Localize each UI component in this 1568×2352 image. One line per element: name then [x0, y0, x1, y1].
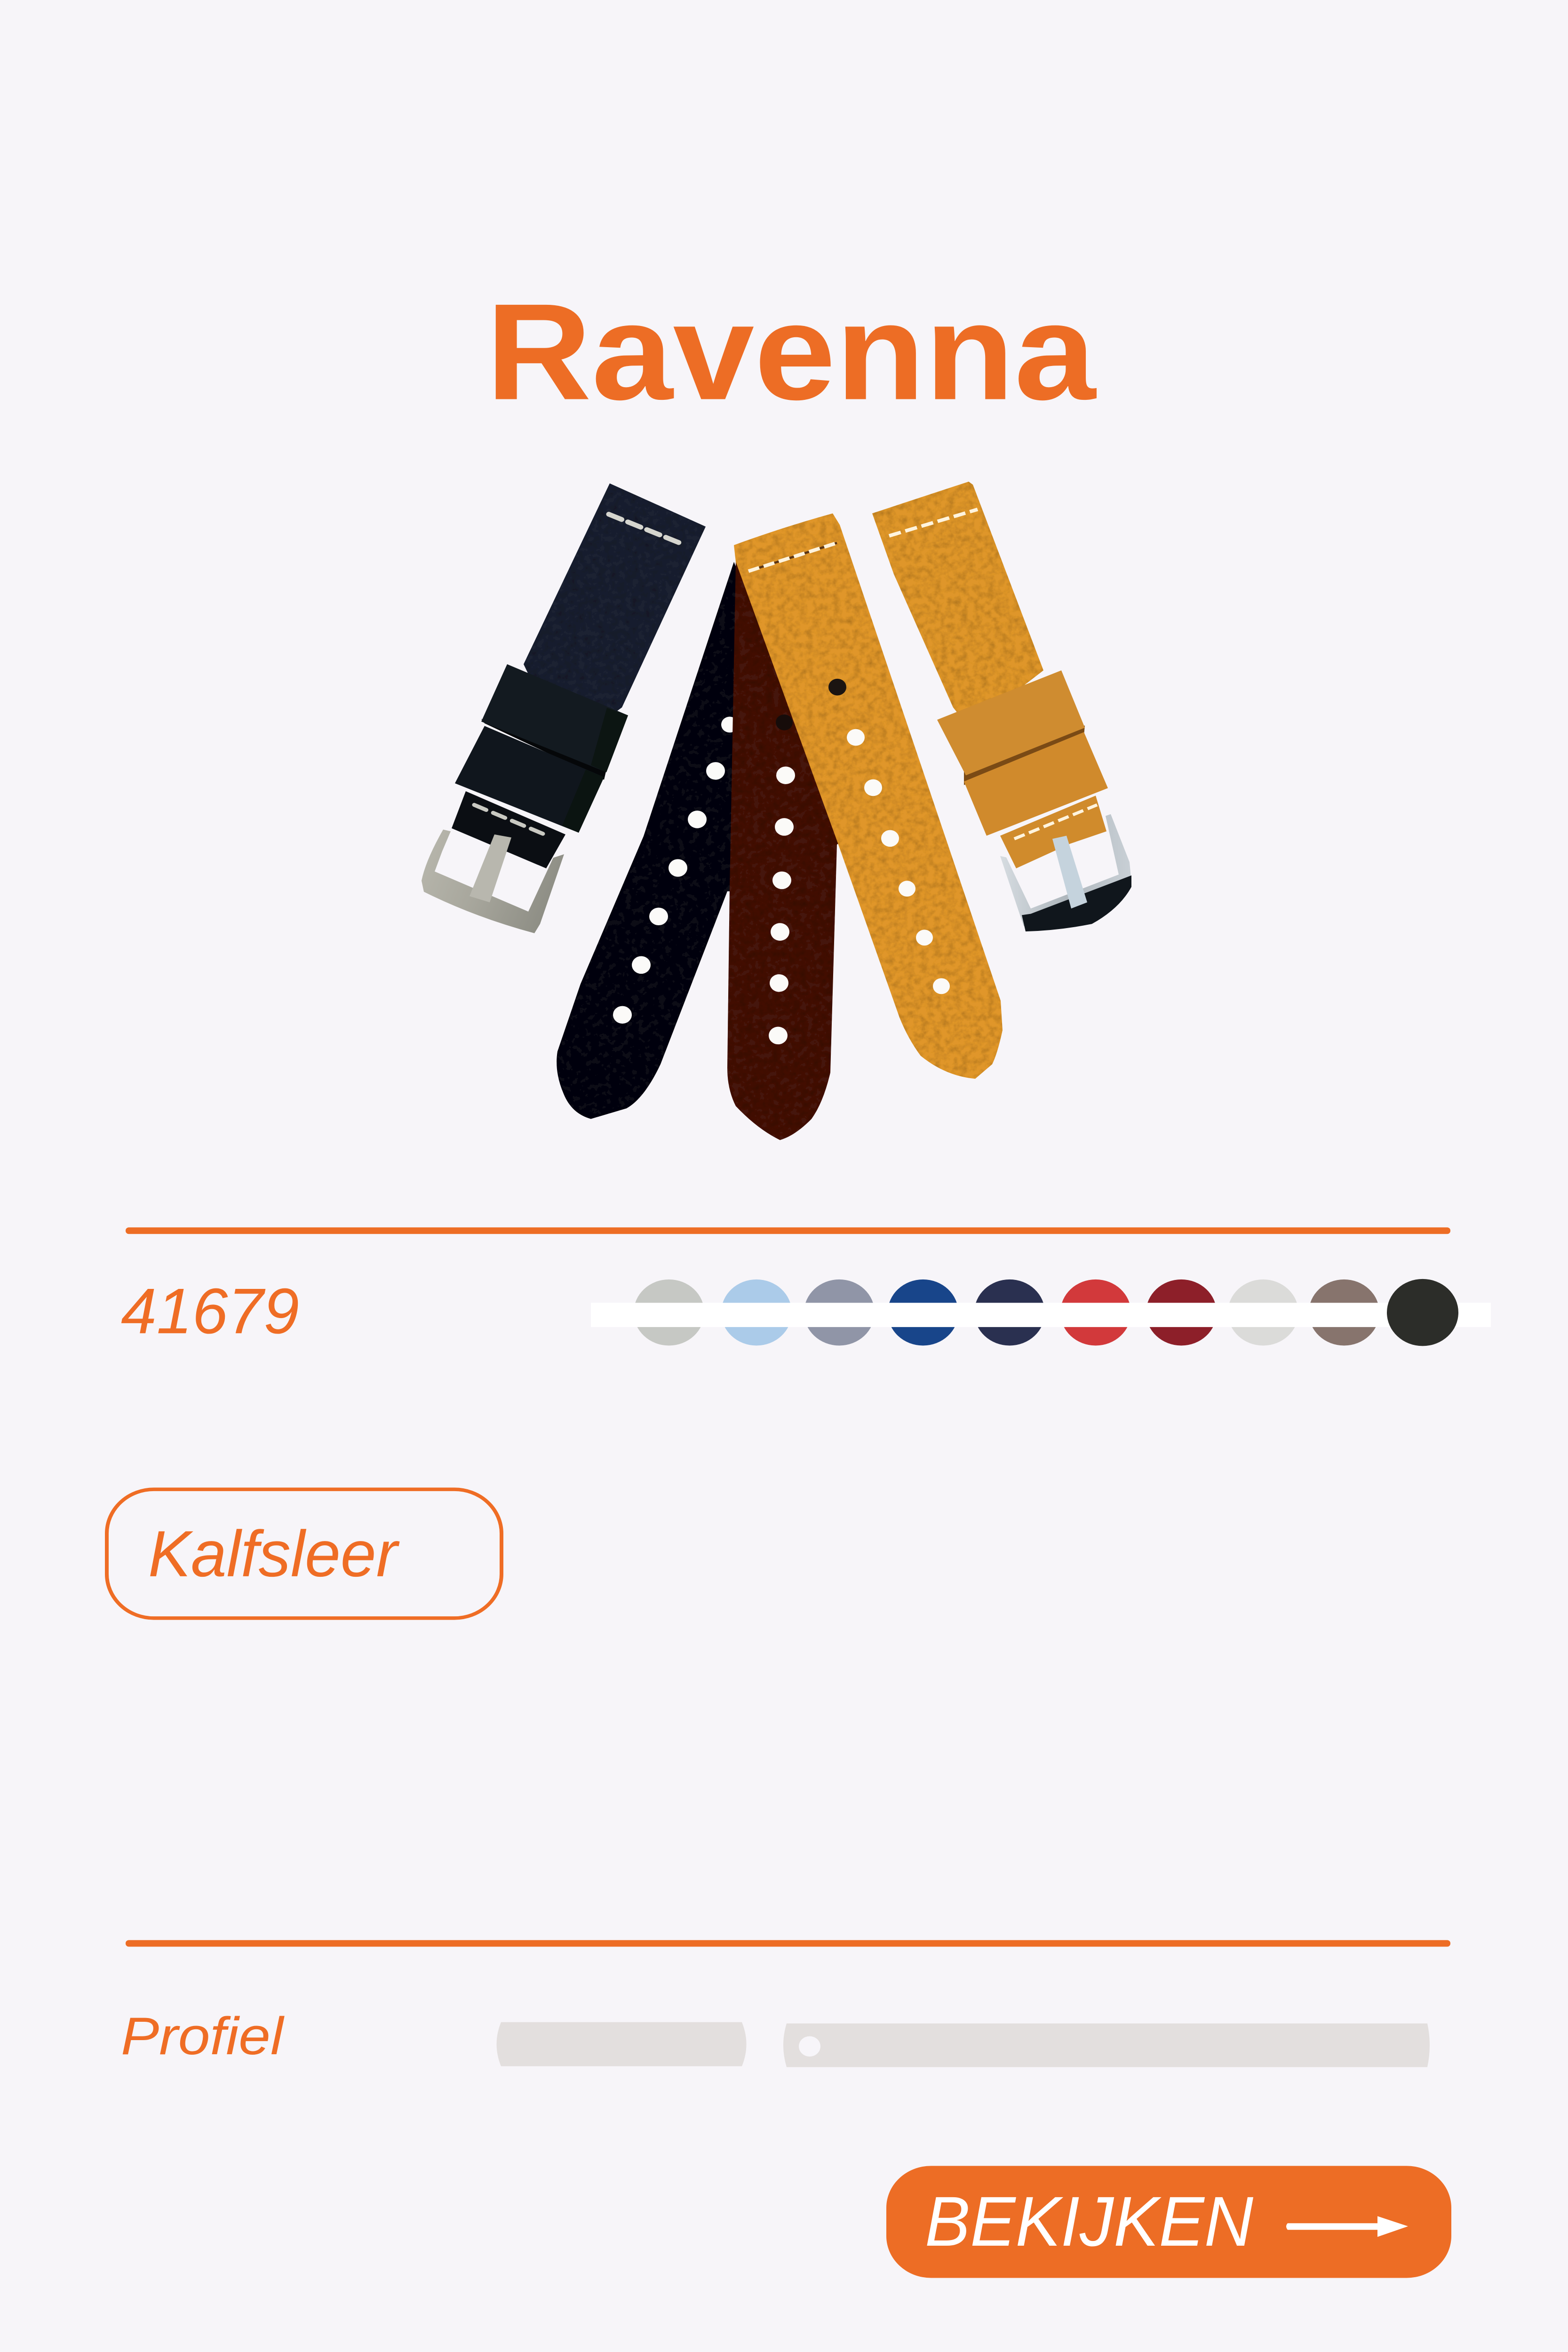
profile label: Profiel	[121, 2007, 285, 2066]
title: Ravenna	[486, 275, 1097, 428]
strap: brown pointed half	[727, 562, 847, 1140]
strap holes	[769, 766, 795, 1044]
strap: black buckle half	[422, 484, 706, 933]
strap holes	[613, 762, 725, 1024]
stitching	[748, 543, 837, 571]
strap profile: short piece	[497, 2022, 746, 2066]
strap: tan buckle half	[872, 482, 1131, 931]
view button: BEKIJKEN	[925, 2182, 1254, 2261]
strap holes	[847, 729, 950, 994]
stitching	[889, 509, 978, 536]
strap: tan pointed half	[734, 513, 1003, 1079]
view button	[886, 2166, 1451, 2278]
product photo: four leather watch straps	[422, 482, 1131, 1140]
buckle tongue	[470, 834, 511, 902]
strap profile: long piece	[783, 2024, 1430, 2067]
colour swatches	[591, 1279, 1491, 1346]
article number: 41679	[121, 1275, 299, 1347]
buckle tongue	[1052, 836, 1087, 908]
material tag	[107, 1489, 501, 1618]
stitching	[609, 514, 681, 543]
strap: black pointed half	[557, 562, 739, 1119]
icon: arrow	[1286, 2216, 1408, 2237]
material tag: Kalfsleer	[148, 1518, 400, 1590]
divider line bottom	[126, 1940, 1450, 1947]
divider line top	[126, 1227, 1450, 1234]
